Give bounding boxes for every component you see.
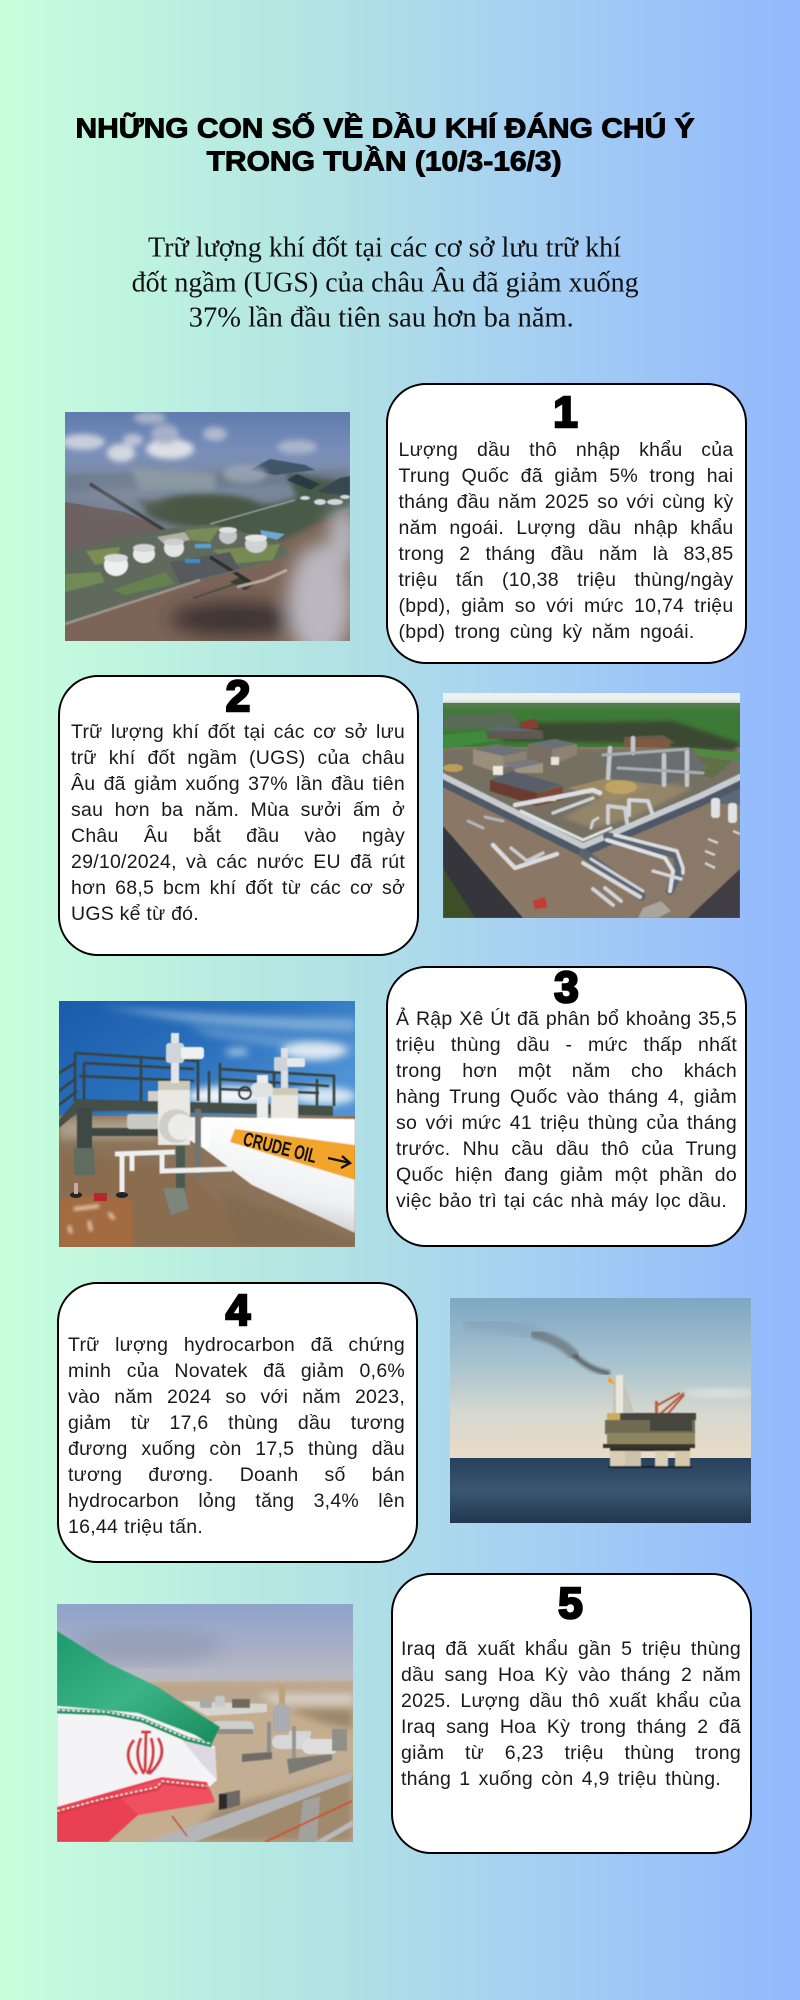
text block 2	[71, 721, 405, 925]
title: TRONG TUẦN (10/3-16/3)	[207, 146, 562, 177]
number 5: 5	[558, 1579, 583, 1628]
image: gas storage plant	[443, 693, 740, 918]
subtitle: đốt ngầm (UGS) của châu Âu đã giảm xuống	[132, 266, 639, 299]
panel: fact 5	[390, 1573, 752, 1854]
subtitle	[132, 232, 639, 334]
text block 4: tương đương. Doanh số bán	[68, 1464, 405, 1486]
text block 3: Quốc hiện đang giảm một phần do	[396, 1164, 737, 1186]
text block 5: Iraq sang Hoa Kỳ trong tháng 2 đã	[401, 1716, 741, 1738]
text block 4: minh của Novatek đã giảm 0,6%	[68, 1360, 405, 1382]
pipe label text: CRUDE OIL	[241, 1129, 319, 1168]
number 1: 1	[553, 388, 578, 436]
text block 4: vào năm 2024 so với năm 2023,	[68, 1386, 405, 1408]
text block 2: UGS kể từ đó.	[71, 903, 199, 925]
panel: fact 1	[386, 383, 746, 664]
subtitle: Trữ lượng khí đốt tại các cơ sở lưu trữ khí	[148, 232, 621, 264]
text block 1: (bpd) trong cùng kỳ năm ngoái.	[398, 621, 694, 643]
text block 5: dầu sang Hoa Kỳ vào tháng 2 năm	[401, 1664, 741, 1686]
text block 1: trong 2 tháng đầu năm là 83,85	[398, 543, 734, 565]
image: crude oil pipeline	[59, 1001, 355, 1247]
text block 5: Iraq đã xuất khẩu gần 5 triệu thùng	[401, 1638, 741, 1660]
panel: fact 4	[57, 1282, 418, 1562]
text block 2: Âu đã giảm xuống 37% lần đầu tiên	[71, 773, 405, 795]
text block 2: Trữ lượng khí đốt tại các cơ sở lưu	[71, 721, 405, 743]
panel: fact 2	[58, 674, 419, 956]
text block 4	[68, 1334, 405, 1538]
title	[76, 111, 695, 177]
text block 3: trước. Nhu cầu dầu thô của Trung	[396, 1138, 737, 1160]
text block 4: hydrocarbon lỏng tăng 3,4% lên	[68, 1490, 405, 1512]
text block 5	[401, 1638, 741, 1790]
text block 1: (bpd), giảm so với mức 10,74 triệu	[398, 595, 734, 617]
text block 1: tháng đầu năm 2025 so với cùng kỳ	[398, 491, 734, 513]
text block 5: tháng 1 xuống còn 4,9 triệu thùng.	[401, 1768, 721, 1790]
text block 3: Ả Rập Xê Út đã phân bổ khoảng 35,5	[396, 1008, 737, 1030]
text block 4: đương xuống còn 17,5 thùng dầu	[68, 1438, 405, 1460]
text block 3	[396, 1008, 737, 1212]
text block 3: việc bảo trì tại các nhà máy lọc dầu.	[396, 1190, 727, 1212]
panel: fact 3	[386, 966, 746, 1246]
text block 5: 2025. Lượng dầu thô xuất khẩu của	[401, 1690, 741, 1712]
image: offshore oil platform	[450, 1298, 751, 1523]
text block 2: 29/10/2024, và các nước EU đã rút	[71, 851, 405, 873]
number 4: 4	[226, 1286, 250, 1335]
subtitle: 37% lần đầu tiên sau hơn ba năm.	[189, 302, 574, 334]
text block 1: Trung Quốc đã giảm 5% trong hai	[398, 465, 734, 487]
image: LNG terminal aerial view	[65, 412, 350, 641]
text block 2: hơn 68,5 bcm khí đốt từ các cơ sở	[71, 877, 405, 899]
text block 2: sau hơn ba năm. Mùa sưởi ấm ở	[71, 799, 405, 821]
number 2: 2	[226, 672, 250, 720]
text block 1: năm ngoái. Lượng dầu nhập khẩu	[398, 517, 734, 539]
text block 2: Châu Âu bắt đầu vào ngày	[71, 825, 405, 847]
text block 1: Lượng dầu thô nhập khẩu của	[398, 439, 734, 461]
text block 4: Trữ lượng hydrocarbon đã chứng	[68, 1334, 405, 1356]
number 3: 3	[554, 963, 579, 1012]
text block 2: trữ khí đốt ngầm (UGS) của châu	[71, 747, 405, 769]
text block 1: triệu tấn (10,38 triệu thùng/ngày	[398, 569, 734, 591]
text block 4: giảm từ 17,6 thùng dầu tương	[68, 1412, 405, 1434]
text block 4: 16,44 triệu tấn.	[68, 1516, 203, 1538]
text block 1	[398, 439, 734, 643]
text block 5: giảm từ 6,23 triệu thùng trong	[401, 1742, 741, 1764]
title: NHỮNG CON SỐ VỀ DẦU KHÍ ĐÁNG CHÚ Ý	[76, 111, 695, 143]
text block 3: so với mức 41 triệu thùng của tháng	[396, 1112, 737, 1134]
text block 3: trong hơn một năm cho khách	[396, 1060, 737, 1082]
text block 3: hàng Trung Quốc vào tháng 4, giảm	[396, 1086, 737, 1108]
image: flag and oil facility	[57, 1604, 353, 1842]
text block 3: triệu thùng dầu - mức thấp nhất	[396, 1034, 737, 1056]
